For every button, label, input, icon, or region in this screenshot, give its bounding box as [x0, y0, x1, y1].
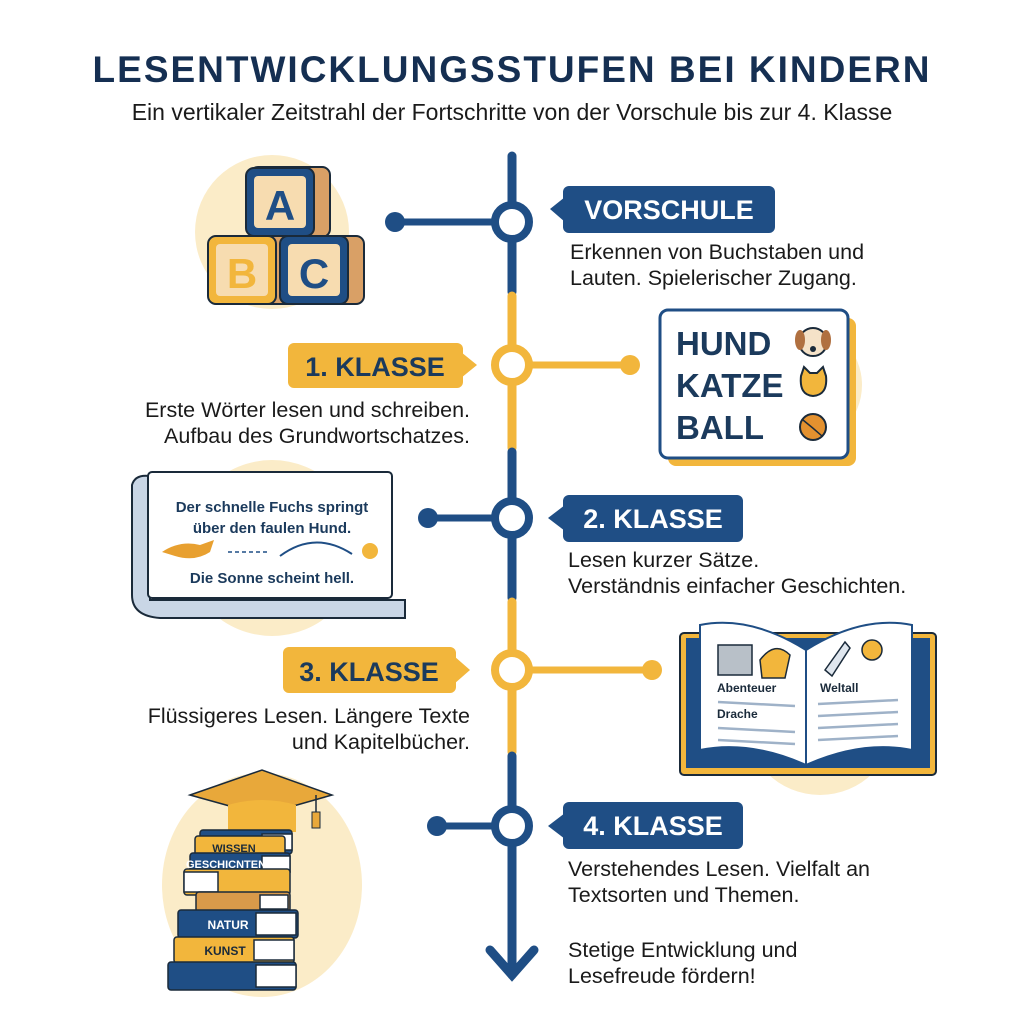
- subtitle: Ein vertikaler Zeitstrahl der Fortschritte von der Vorschule bis zur 4. Klasse: [132, 99, 892, 125]
- icon: word card: BALL: [676, 409, 764, 446]
- icon: book stack with graduation cap: KUNST: [204, 944, 246, 958]
- icon: word card: HUND: [676, 325, 771, 362]
- label: 3. Klasse: [283, 647, 470, 693]
- icon: ABC blocks: C: [299, 250, 329, 297]
- icon: book stack with graduation cap: WISSEN: [212, 843, 256, 855]
- icon: open book: Abenteuer: [717, 681, 777, 695]
- icon: dog: [795, 328, 831, 356]
- text: 3. Klasse: Flüssigeres Lesen. Längere Texte: [148, 704, 470, 728]
- icon: open book: Weltall: [820, 681, 858, 695]
- icon: book stack with graduation cap: [162, 770, 362, 997]
- icon: sentence scroll: Der schnelle Fuchs springt: [176, 499, 368, 516]
- icon: cat: [801, 367, 826, 396]
- text: 4. Klasse: Textsorten und Themen.: [568, 883, 799, 907]
- label: 1. Klasse: 1. KLASSE: [305, 352, 445, 382]
- icon: open book: Drache: [717, 707, 758, 721]
- closing text: Lesefreude fördern!: [568, 964, 756, 988]
- timeline: [395, 156, 652, 975]
- icon: open book: [680, 623, 936, 795]
- label: 4. Klasse: [548, 802, 743, 849]
- text: 4. Klasse: Verstehendes Lesen. Vielfalt an: [568, 857, 870, 881]
- text: 3. Klasse: und Kapitelbücher.: [292, 730, 470, 754]
- label: 2. Klasse: [548, 495, 743, 542]
- icon: book stack with graduation cap: GESCHICNTEN: [186, 859, 266, 871]
- text: 2. Klasse: Verständnis einfacher Geschichten.: [568, 574, 906, 598]
- icon: sentence scroll: über den faulen Hund.: [193, 520, 351, 537]
- label: 1. Klasse: [288, 343, 477, 388]
- label: 3. Klasse: 3. KLASSE: [299, 657, 439, 687]
- closing text: Stetige Entwicklung und: [568, 938, 797, 962]
- icon: ball: [800, 414, 826, 440]
- icon: word card: KATZE: [676, 367, 784, 404]
- label: 4. Klasse: 4. KLASSE: [583, 811, 723, 841]
- text: 2. Klasse: Lesen kurzer Sätze.: [568, 548, 759, 572]
- icon: word card: [660, 310, 862, 466]
- icon: ABC blocks: B: [227, 250, 257, 297]
- icon: ABC blocks: A: [265, 182, 295, 229]
- text: 1. Klasse: Aufbau des Grundwortschatzes.: [164, 424, 470, 448]
- label: 2. Klasse: 2. KLASSE: [583, 504, 723, 534]
- label: Vorschule: [550, 186, 775, 233]
- icon: ABC blocks: [195, 155, 364, 309]
- icon: book stack with graduation cap: NATUR: [207, 918, 249, 932]
- text: Vorschule: Lauten. Spielerischer Zugang.: [570, 266, 857, 290]
- icon: sentence scroll: [132, 460, 405, 636]
- text: Vorschule: Erkennen von Buchstaben und: [570, 240, 864, 264]
- icon: sentence scroll: Die Sonne scheint hell.: [190, 570, 354, 587]
- label: Vorschule: VORSCHULE: [584, 195, 754, 225]
- text: 1. Klasse: Erste Wörter lesen und schreiben.: [145, 398, 470, 422]
- title: LESENTWICKLUNGSSTUFEN BEI KINDERN: [93, 49, 931, 90]
